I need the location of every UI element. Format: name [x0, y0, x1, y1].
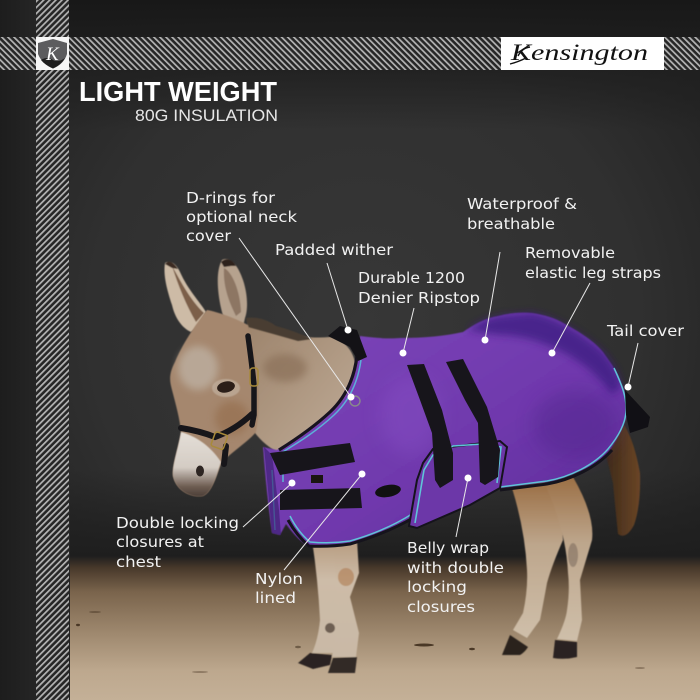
ears: [164, 259, 247, 333]
blanket highlight: [380, 375, 440, 455]
blanket body: [263, 313, 627, 546]
callout: D-rings: [186, 189, 354, 400]
callout: Double locking closures: Double locking: [116, 514, 239, 532]
blanket label tag: [311, 475, 323, 483]
title: LIGHT WEIGHT: [79, 76, 277, 107]
callout: Double locking closures: closures at: [116, 533, 204, 551]
callout: Padded wither: Padded wither: [275, 241, 394, 259]
callout: D-rings: D-rings for: [186, 189, 276, 207]
callout: Durable ripstop: [358, 269, 480, 356]
nostril: [196, 466, 204, 476]
neck: [248, 322, 356, 452]
D-ring: [350, 396, 360, 406]
callout: Tail cover: Tail cover: [606, 322, 685, 340]
hem binding: [288, 518, 413, 546]
front edge shade: [264, 447, 281, 535]
blanket neck binding: [279, 356, 357, 450]
rear hem piping: [500, 368, 626, 487]
front edge piping: [272, 470, 283, 530]
callout: D-rings: optional neck: [186, 208, 297, 226]
padded wither: [328, 326, 367, 361]
donkey in blanket illustration: [164, 259, 650, 673]
hind legs: [502, 477, 592, 659]
mane: [246, 318, 312, 341]
callout: Nylon lined: [255, 470, 366, 607]
striped horizontal band: [0, 37, 700, 70]
floor specks: [76, 611, 645, 673]
subtitle: 80G INSULATION: [135, 106, 278, 125]
blanket rear shading: [533, 391, 617, 459]
callout: Waterproof: Waterproof &: [467, 195, 577, 213]
halter buckles: [211, 368, 258, 450]
muzzle: [173, 432, 221, 496]
callout: Padded wither: [275, 241, 394, 334]
front legs: [298, 540, 359, 673]
neck shading: [263, 354, 307, 382]
head: [170, 310, 259, 496]
chest straps: [270, 443, 362, 510]
halter: [181, 336, 254, 464]
callout: Waterproof: breathable: [467, 215, 555, 233]
callout: D-rings: cover: [186, 227, 232, 245]
callout: Removable leg straps: [525, 244, 661, 356]
callout: Double locking closures: [116, 480, 296, 571]
blanket logo patch: [374, 483, 402, 499]
forehead highlight: [178, 346, 218, 390]
hem piping: [290, 514, 412, 543]
callout: Durable ripstop: Durable 1200: [358, 269, 465, 287]
blanket neck piping: [281, 360, 361, 453]
tail cover: [625, 390, 650, 433]
eye: [212, 379, 240, 397]
blanket top shading: [468, 313, 621, 395]
callout: Removable leg straps: Removable: [525, 244, 615, 262]
callout: Belly wrap: locking: [407, 578, 467, 596]
cheek tone: [215, 401, 249, 435]
logo: Kensington wordmark: [501, 37, 664, 70]
rear hem binding: [500, 450, 612, 490]
striped vertical band: [36, 0, 69, 700]
callout: Tail cover: [606, 322, 685, 390]
callout: Belly wrap: closures: [407, 598, 475, 616]
callout: Belly wrap: with double: [407, 559, 504, 577]
callout: Durable ripstop: Denier Ripstop: [358, 289, 480, 307]
logo: K shield: K: [45, 44, 60, 65]
logo: Kensington wordmark: Kensington: [510, 40, 648, 65]
callout: Belly wrap: [407, 474, 504, 616]
callout: Removable leg straps: elastic leg straps: [525, 264, 661, 282]
tail: [606, 425, 640, 536]
callout: Waterproof: [467, 195, 577, 344]
vertical belly straps: [407, 359, 500, 488]
callout: Double locking closures: chest: [116, 553, 161, 571]
callout: Belly wrap: Belly wrap: [407, 539, 489, 557]
callout: Nylon lined: Nylon: [255, 570, 303, 588]
callout: Nylon lined: lined: [255, 589, 296, 607]
belly wrap: [409, 441, 507, 528]
logo: K shield: [36, 37, 69, 70]
